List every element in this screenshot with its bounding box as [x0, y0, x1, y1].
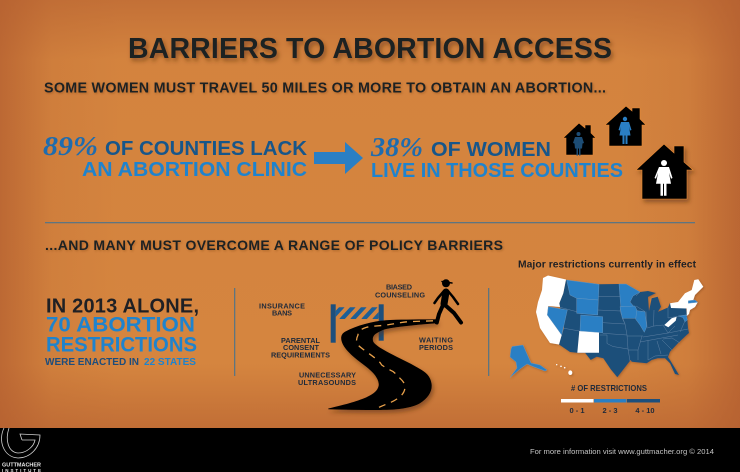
states with 4-10 restrictions (base silhouette)	[559, 280, 689, 377]
barrier	[330, 304, 387, 343]
footer band	[0, 428, 740, 472]
icon: medium house, blue figure	[605, 106, 646, 146]
map heading: Major restrictions currently in effect	[518, 260, 697, 270]
statistic: 70 restrictions in 2013: WERE ENACTED IN	[45, 357, 139, 368]
label: parental consent: CONSENT	[283, 343, 320, 352]
subheading: policy barriers: ...AND MANY MUST OVERCOME A RANGE OF POLICY BARRIERS	[45, 237, 503, 253]
legend: scale labels	[569, 406, 655, 415]
road	[328, 319, 437, 410]
statistic: 70 restrictions in 2013: 22 STATES	[144, 357, 196, 368]
US map of restrictions	[510, 276, 703, 378]
road illustration with barrier and walking figure	[328, 279, 461, 410]
section divider	[45, 222, 695, 223]
statistic: 89% of counties: 89%	[43, 131, 98, 161]
label: unnecessary ultrasounds: ULTRASOUNDS	[298, 378, 356, 387]
statistic: 38% of women: 38%	[370, 132, 423, 162]
label: biased counseling: COUNSELING	[375, 290, 425, 299]
West Virginia	[664, 317, 677, 327]
statistic: 70 restrictions in 2013	[45, 296, 199, 368]
statistic: 89% of counties	[43, 131, 307, 181]
walking figure	[434, 279, 461, 322]
statistic: 89% of counties: OF COUNTIES LACK	[105, 137, 307, 160]
legend: scale labels: 4 - 10	[635, 406, 655, 415]
statistic: 38% of women: OF WOMEN	[431, 138, 551, 161]
legend: colour scale	[561, 399, 660, 402]
statistic: 70 restrictions in 2013: IN 2013 ALONE,	[46, 296, 199, 318]
statistic: 38% of women: LIVE IN THOSE COUNTIES	[371, 159, 623, 182]
west coast: WA, OR, CA	[536, 276, 566, 344]
label: waiting periods: WAITING	[419, 336, 453, 345]
legend: scale labels: 0 - 1	[569, 406, 585, 415]
arrow	[314, 142, 363, 174]
logo: Guttmacher Institute	[2, 428, 41, 472]
title: BARRIERS TO ABORTION ACCESS	[128, 33, 612, 65]
legend heading: # OF RESTRICTIONS	[571, 383, 647, 393]
Hawaii	[556, 364, 572, 375]
panel divider right	[488, 288, 489, 376]
label: biased counseling: BIASED	[386, 282, 412, 291]
panel divider left	[234, 288, 235, 376]
legend: scale labels: 2 - 3	[602, 406, 618, 415]
statistic: 38% of women	[370, 132, 623, 182]
footer credit: For more information visit www.guttmacher.org © 2014	[530, 447, 714, 456]
New York, New England, New Jersey	[670, 279, 703, 316]
label: unnecessary ultrasounds: UNNECESSARY	[299, 370, 356, 379]
road centre dashes	[356, 321, 433, 408]
subheading: travel: SOME WOMEN MUST TRAVEL 50 MILES OR MORE TO OBTAIN AN ABORTION...	[44, 80, 606, 96]
label: waiting periods: PERIODS	[419, 343, 453, 352]
label: parental consent: PARENTAL	[281, 336, 321, 345]
statistic: 70 restrictions in 2013: 70 ABORTION	[46, 314, 195, 337]
logo: Guttmacher Institute: GUTTMACHER	[2, 462, 41, 468]
label: insurance bans: INSURANCE	[259, 302, 305, 311]
states with 2-3 restrictions	[510, 280, 698, 378]
statistic: 89% of counties: AN ABORTION CLINIC	[82, 158, 307, 181]
state borders	[560, 284, 688, 361]
New Mexico	[577, 331, 599, 353]
icon: small house, dark figure	[563, 123, 596, 156]
Alaska	[510, 345, 547, 378]
statistic: 70 restrictions in 2013: RESTRICTIONS	[46, 334, 197, 357]
label: insurance bans: BANS	[272, 309, 292, 318]
states with 0-1 restrictions	[536, 276, 703, 353]
label: parental consent: REQUIREMENTS	[271, 350, 330, 359]
icon: large house, white figure	[636, 144, 693, 199]
